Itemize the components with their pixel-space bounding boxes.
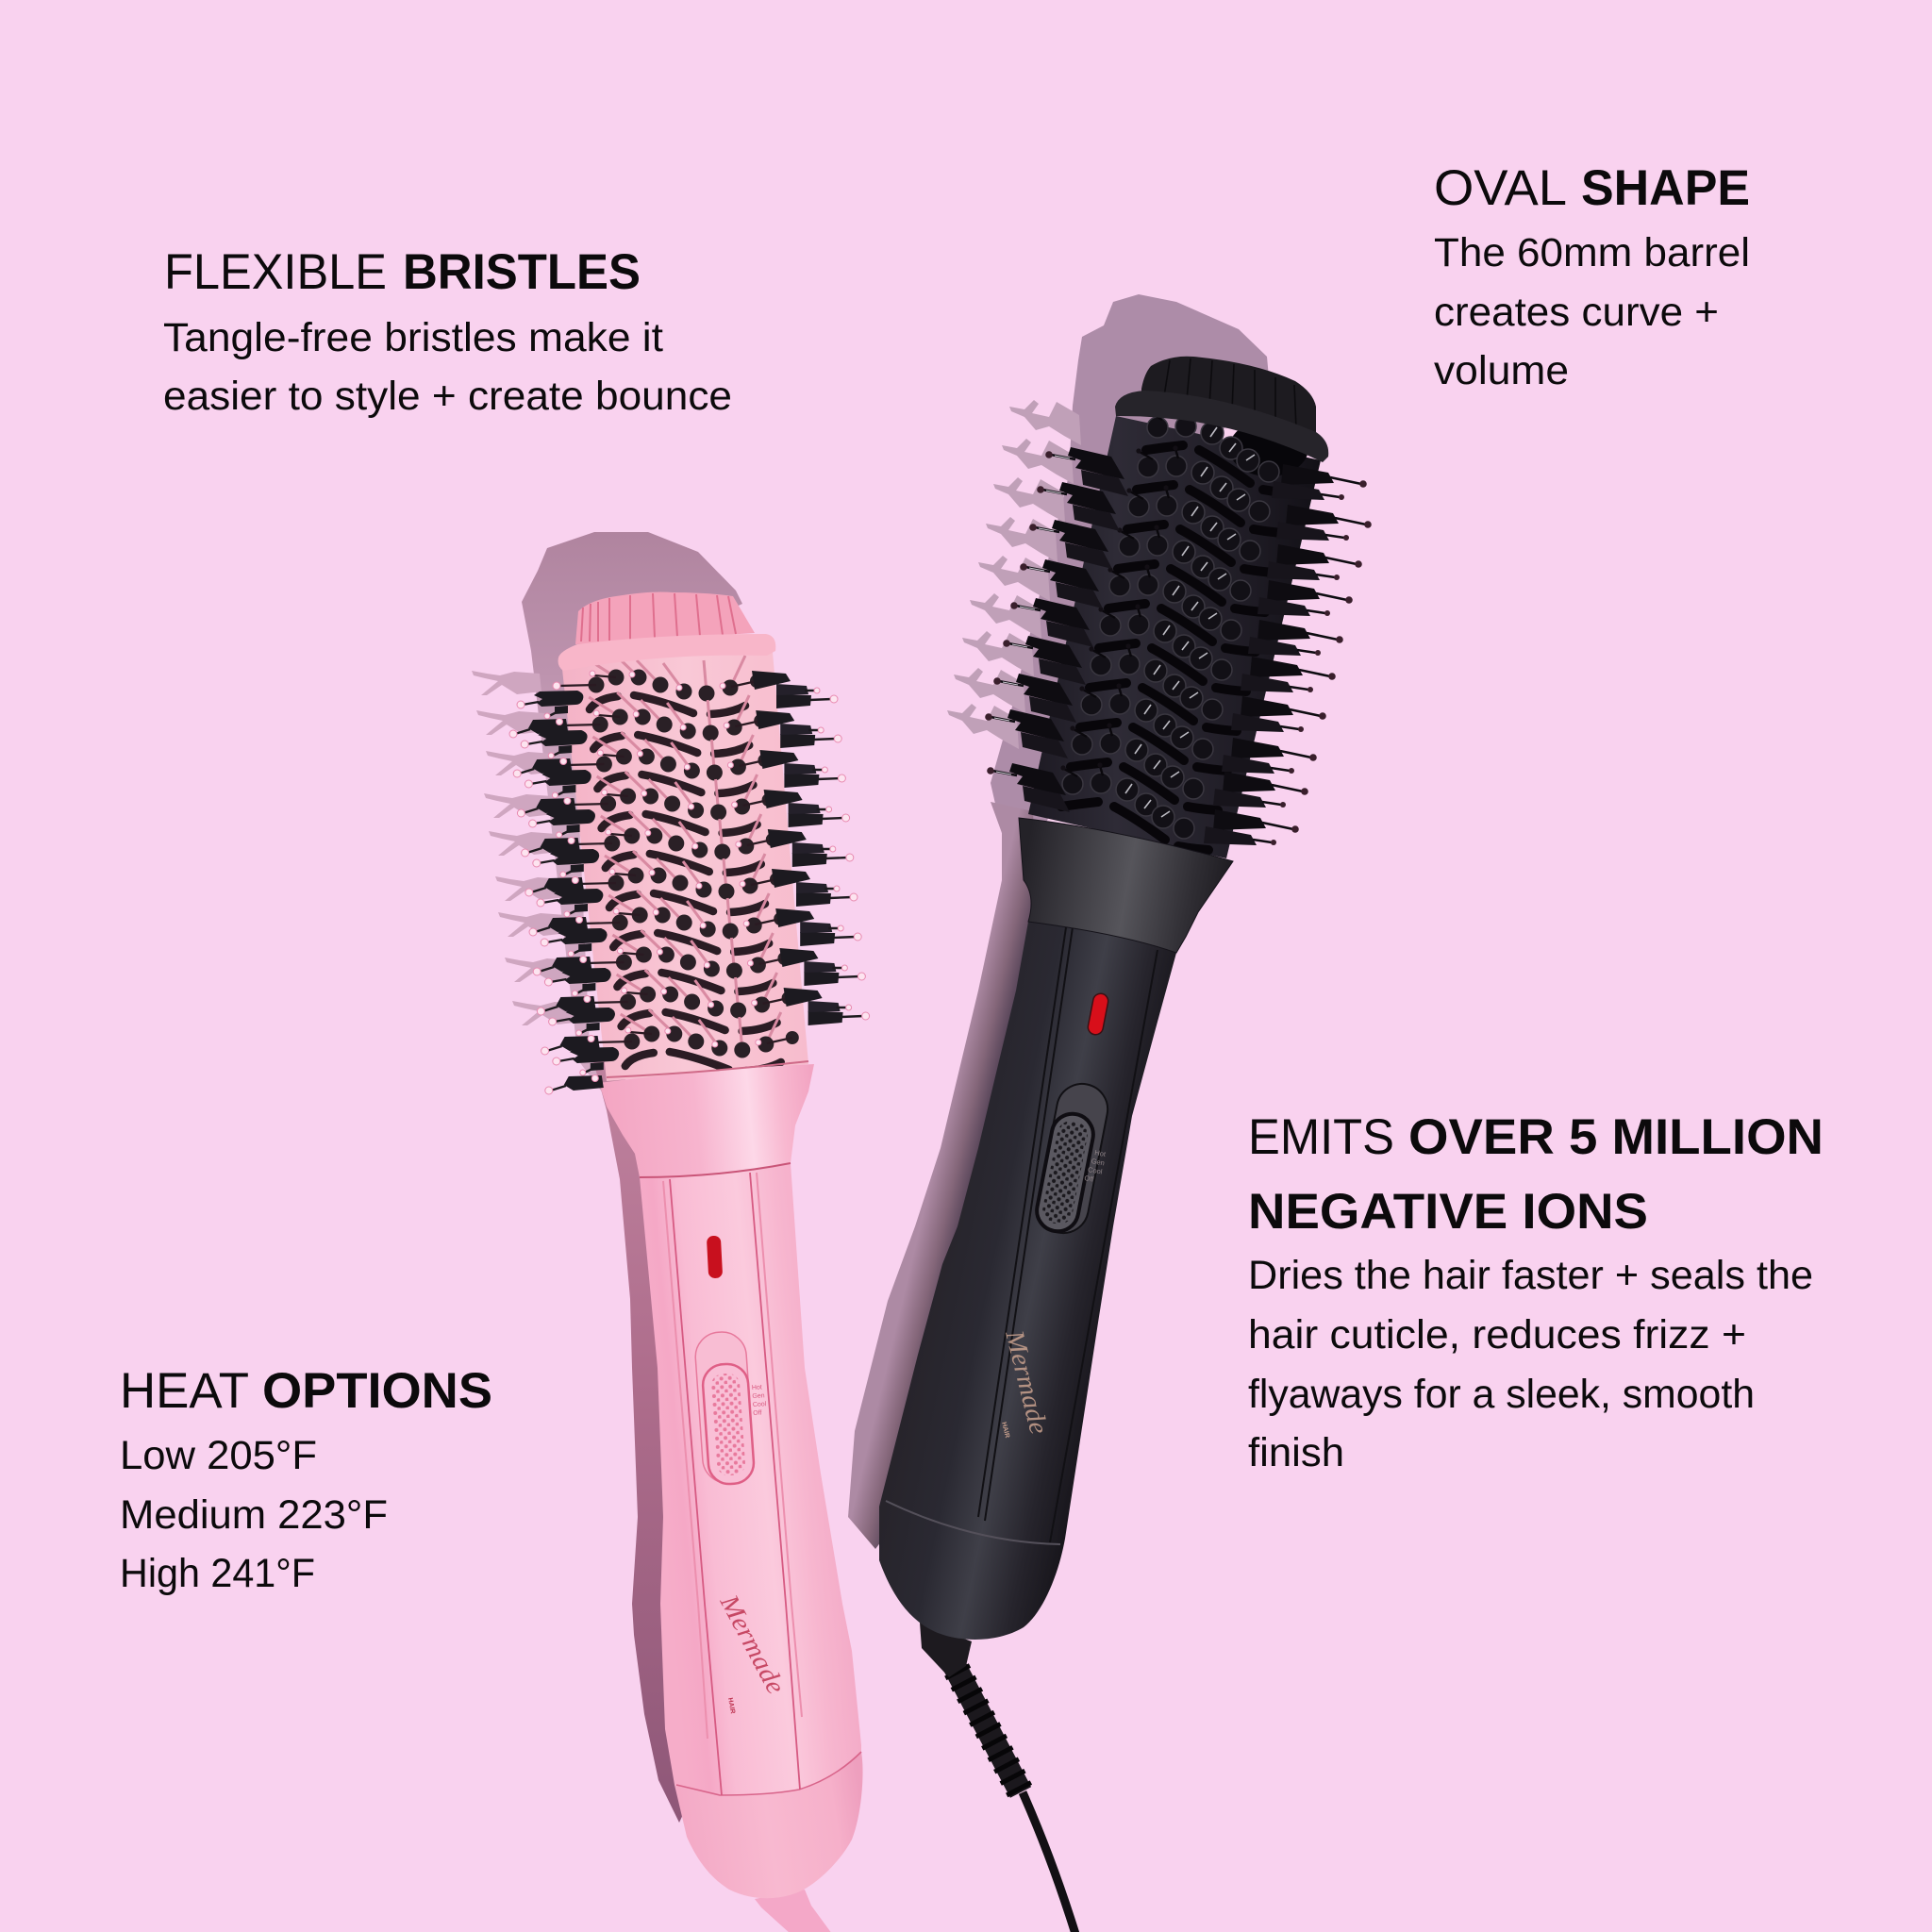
body: heat options: Low 205°F	[120, 1433, 317, 1478]
body: heat options: High 241°F	[120, 1551, 315, 1596]
pink logo: HAIR	[726, 1697, 736, 1714]
pink bristles	[509, 671, 870, 1094]
body: negative ions: Dries the hair faster + seals the	[1248, 1253, 1813, 1298]
pink handle	[640, 1163, 863, 1898]
heading: oval shape	[1434, 160, 1750, 216]
body: negative ions: flyaways for a sleek, smooth	[1248, 1372, 1755, 1417]
black handle	[879, 901, 1184, 1640]
black brush shadow	[848, 294, 1269, 1549]
black switch labels: Cool	[1087, 1165, 1103, 1176]
black brush	[848, 294, 1372, 1932]
pink barrel	[553, 592, 814, 1177]
black logo: Mermade	[999, 1326, 1053, 1437]
body: heat options	[120, 1433, 388, 1596]
heading: negative ions: EMITS	[1248, 1109, 1394, 1165]
pink switch labels: Cool	[753, 1401, 767, 1408]
text block: flexible bristles	[163, 244, 732, 419]
body: flexible bristles: easier to style + create bounce	[163, 374, 732, 419]
black switch labels: Gen	[1091, 1157, 1106, 1167]
pink flare	[599, 1064, 814, 1177]
heading: flexible bristles: FLEXIBLE	[164, 244, 387, 300]
body: oval shape: The 60mm barrel	[1434, 230, 1750, 275]
black switch	[1033, 1079, 1112, 1238]
black cord	[920, 1623, 1075, 1932]
pink switch labels: Off	[753, 1409, 762, 1417]
heading: negative ions	[1248, 1109, 1824, 1240]
body: oval shape: volume	[1434, 348, 1569, 393]
heading: flexible bristles: BRISTLES	[403, 244, 641, 300]
text block: negative ions	[1248, 1109, 1824, 1475]
text block: heat options	[120, 1363, 492, 1596]
body: flexible bristles: Tangle-free bristles make it	[163, 315, 663, 360]
heading: heat options: HEAT	[120, 1363, 249, 1419]
pink switch	[693, 1330, 756, 1486]
black switch labels	[1084, 1147, 1108, 1185]
black switch labels: Hot	[1094, 1148, 1108, 1158]
body: negative ions: hair cuticle, reduces frizz +	[1248, 1312, 1746, 1357]
pink switch labels	[752, 1384, 767, 1417]
black switch labels: Off	[1084, 1174, 1095, 1184]
text block: oval shape	[1434, 160, 1750, 393]
black barrel	[1019, 357, 1328, 953]
body: oval shape: creates curve +	[1434, 290, 1719, 335]
body: oval shape	[1434, 230, 1750, 393]
heading: heat options: OPTIONS	[262, 1363, 492, 1419]
pink brush shadow	[472, 532, 742, 1823]
body: heat options: Medium 223°F	[120, 1492, 388, 1538]
pink brush	[472, 532, 870, 1932]
pink switch labels: Gen	[752, 1392, 765, 1400]
heading: flexible bristles	[164, 244, 641, 300]
pink cord	[755, 1890, 832, 1932]
heading: negative ions: OVER 5 MILLION	[1408, 1109, 1824, 1165]
heading: oval shape: SHAPE	[1581, 160, 1750, 216]
heading: heat options	[120, 1363, 492, 1419]
pink cap	[558, 592, 775, 671]
heading: oval shape: OVAL	[1434, 160, 1567, 216]
body: negative ions: finish	[1248, 1430, 1344, 1475]
black logo: HAIR	[1000, 1422, 1010, 1439]
body: negative ions	[1248, 1253, 1813, 1475]
black flare	[1019, 818, 1233, 953]
pink switch labels: Hot	[752, 1384, 762, 1391]
heading: negative ions: NEGATIVE IONS	[1248, 1184, 1648, 1240]
black bristles	[985, 447, 1372, 845]
pink LED	[707, 1236, 723, 1278]
pink logo: Mermade	[713, 1590, 791, 1699]
body: flexible bristles	[163, 315, 732, 419]
black cap	[1115, 357, 1328, 462]
black LED	[1087, 992, 1109, 1036]
